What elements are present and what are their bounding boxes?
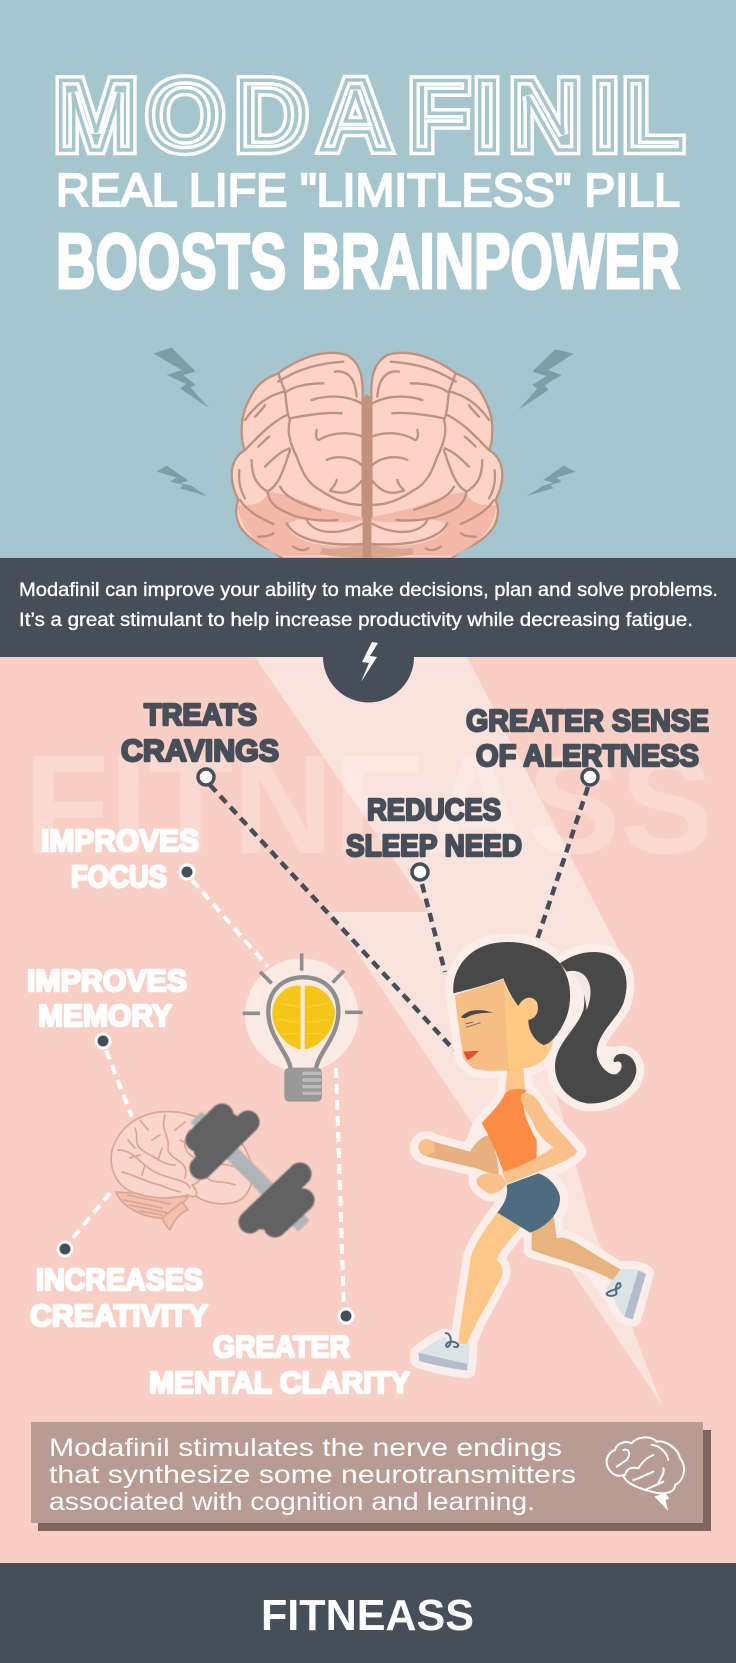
callout text: associated with cognition and learning. [49, 1488, 535, 1516]
callout text: that synthesize some neurotransmitters [49, 1461, 576, 1489]
label: greater mental clarity: GREATER [213, 1329, 350, 1364]
marker: clarity [339, 1309, 353, 1323]
runner rear forearm [425, 1136, 499, 1177]
label: reduces sleep need: REDUCES [367, 792, 501, 827]
label: reduces sleep need: SLEEP NEED [346, 828, 522, 863]
title: MODAFINIL striped: MODAFINIL [54, 60, 684, 172]
watermark FITNEASS: FITNEASS [24, 725, 713, 883]
label: increases creativity: CREATIVITY [30, 1298, 208, 1333]
runner front shoe [418, 1333, 469, 1371]
dashed connectors white [68, 880, 344, 1310]
runner back shoe [606, 1269, 646, 1319]
label: increases creativity: INCREASES [36, 1262, 203, 1297]
runner hands [418, 1139, 507, 1194]
label: greater sense of alertness: OF ALERTNESS [476, 738, 699, 773]
icon: dumbbell [196, 1115, 304, 1226]
intro text: Modafinil can improve your ability to make decisions, plan and solve problems. [19, 580, 718, 601]
title: MODAFINIL striped: MODAFINIL [54, 60, 684, 172]
label: increases creativity [30, 1262, 208, 1333]
label: improves focus [41, 823, 199, 894]
footer brand: FITNEASS [261, 1591, 474, 1640]
label: greater mental clarity: MENTAL CLARITY [149, 1365, 410, 1400]
marker: creativity [58, 1242, 72, 1256]
light beam [255, 657, 662, 1405]
runner front leg [458, 1213, 521, 1345]
label: greater sense of alertness: GREATER SENSE [466, 703, 709, 738]
label: treats cravings: TREATS [144, 697, 257, 732]
label: improves memory [27, 963, 187, 1033]
label: greater mental clarity [149, 1329, 410, 1400]
runner face [455, 979, 553, 1071]
runner back leg [532, 1213, 622, 1283]
title block [54, 60, 684, 305]
callout text [49, 1434, 576, 1516]
label: improves focus: IMPROVES [41, 823, 199, 858]
marker: focus [180, 865, 194, 879]
intro text [19, 580, 718, 631]
runner shorts [497, 1173, 560, 1233]
label: improves memory: IMPROVES [27, 963, 187, 998]
runner ponytail [555, 952, 636, 1103]
runner top [482, 1089, 537, 1172]
runner front arm [502, 1093, 577, 1184]
marker: treats cravings [198, 769, 214, 785]
marker: sleep need [412, 864, 428, 880]
icon: front brain [232, 353, 502, 559]
dark intro band [0, 558, 736, 657]
badge: half circle with bolt [323, 642, 414, 702]
subtitle: real life limitless pill: REAL LIFE "LIMITLESS" PILL [56, 164, 680, 216]
icon: brain lifting dumbbell [111, 1112, 304, 1230]
label: reduces sleep need [346, 792, 522, 863]
runner halo [418, 942, 646, 1371]
label: improves focus: FOCUS [71, 859, 167, 894]
runner neck [505, 1067, 525, 1095]
label: treats cravings: CRAVINGS [121, 733, 279, 768]
runner illustration [418, 942, 646, 1371]
label: improves memory: MEMORY [38, 998, 172, 1033]
dashed connectors dark [210, 785, 588, 1050]
icon: side brain [111, 1112, 252, 1230]
icon: lightning bolts [153, 348, 576, 496]
marker: alertness [582, 769, 598, 785]
icon: brain with lightning bolts [153, 348, 576, 559]
icon: white brain with bolt [607, 1437, 684, 1510]
icon: light bulb with brain [243, 953, 363, 1102]
label: treats cravings [121, 697, 279, 768]
marker: memory [96, 1034, 110, 1048]
intro text: It’s a great stimulant to help increase productivity while decreasing fatigue. [19, 610, 693, 631]
footer band [0, 1563, 736, 1663]
label: greater sense of alertness [466, 703, 709, 773]
callout box [31, 1422, 711, 1531]
pink background panel [0, 657, 736, 1563]
callout text: Modafinil stimulates the nerve endings [49, 1434, 562, 1462]
header background [0, 0, 736, 558]
runner hair [453, 942, 570, 1045]
